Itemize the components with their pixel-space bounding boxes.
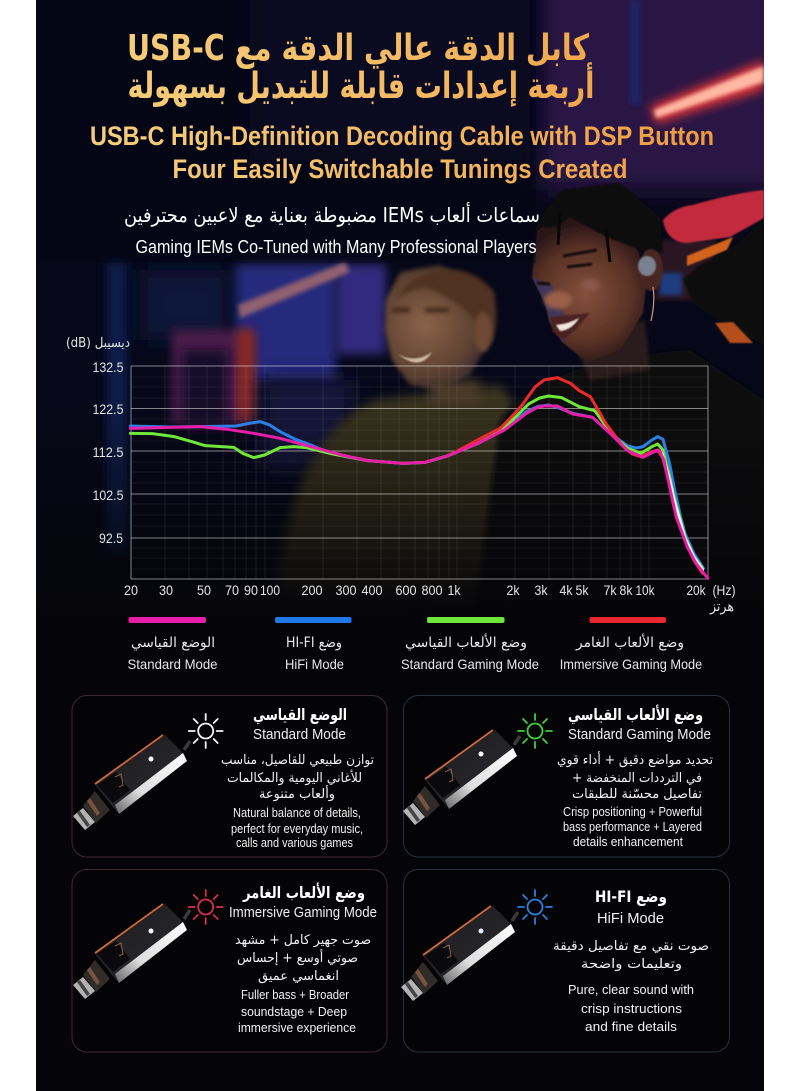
y-axis labels bbox=[92, 359, 124, 546]
card heading: Immersive Gaming Mode bbox=[229, 904, 377, 921]
card heading: Standard Mode bbox=[253, 726, 346, 743]
card description: وتعليمات واضحة bbox=[581, 957, 682, 972]
legend: standard mode: Standard Mode bbox=[128, 656, 218, 672]
x-axis labels: 100 bbox=[260, 582, 280, 598]
card heading bbox=[595, 887, 667, 927]
card heading: الوضع القياسي bbox=[253, 705, 347, 725]
subtitle bbox=[124, 202, 540, 257]
y-axis labels: 122.5 bbox=[92, 401, 124, 417]
icon: blue sun bbox=[518, 890, 552, 924]
card description: صوتي أوسع + إحساس bbox=[237, 949, 358, 966]
legend: standard gaming mode: Standard Gaming Mode bbox=[401, 656, 539, 672]
panel: immersive gaming mode bbox=[72, 870, 387, 1052]
title: Arabic headline: أربعة إعدادات قابلة للتبديل بسهولة bbox=[128, 62, 594, 107]
card heading: وضع الألعاب الغامر bbox=[242, 883, 365, 902]
y-axis unit: ديسيبل (dB) bbox=[66, 336, 130, 351]
card description: انغماسي عميق bbox=[258, 969, 339, 984]
card description: Crisp positioning + Powerful bbox=[563, 804, 702, 819]
device: USB-C decoder, green mode bbox=[403, 730, 520, 825]
legend bbox=[128, 617, 702, 672]
curve: HiFi mode bbox=[130, 405, 703, 568]
curve: white highlight overlap bbox=[662, 454, 703, 570]
x-axis labels: 7k bbox=[604, 582, 617, 598]
legend: immersive gaming mode: وضع الألعاب الغامر bbox=[575, 633, 684, 651]
x-axis labels: 70 bbox=[225, 582, 239, 598]
x-axis labels: 800 bbox=[422, 582, 443, 598]
legend: standard gaming mode bbox=[401, 617, 539, 672]
card description: calls and various games bbox=[236, 835, 353, 850]
legend: immersive gaming mode bbox=[560, 617, 702, 672]
card heading: وضع HI-FI bbox=[595, 887, 667, 906]
card description: للأغاني اليومية والمكالمات bbox=[227, 769, 362, 786]
x-axis labels: 4k bbox=[560, 582, 573, 598]
x-axis labels: 200 bbox=[302, 582, 323, 598]
card description: توازن طبيعي للقاصيل، مناسب bbox=[221, 753, 374, 768]
device: USB-C decoder, white light bbox=[73, 735, 190, 830]
curve: standard mode bbox=[130, 406, 708, 578]
legend: standard mode: الوضع القياسي bbox=[131, 635, 215, 651]
x-axis labels: 10k bbox=[636, 582, 655, 598]
panel: HiFi mode bbox=[401, 870, 730, 1052]
x-axis labels: 2k bbox=[506, 582, 520, 598]
y-axis labels: 92.5 bbox=[99, 530, 123, 546]
card description: تفاصيل محسّنة للطبقات bbox=[572, 787, 702, 802]
x-axis labels: 30 bbox=[159, 582, 173, 598]
card description: bass performance + Layered bbox=[563, 819, 702, 834]
legend: standard gaming mode: وضع الألعاب القياسي bbox=[405, 633, 527, 651]
card description: Natural balance of details, bbox=[233, 805, 361, 820]
icon: white sun bbox=[189, 714, 223, 748]
curve: immersive gaming mode bbox=[447, 378, 703, 573]
chart grid bbox=[131, 366, 708, 579]
card description bbox=[557, 751, 713, 849]
legend: standard mode bbox=[128, 617, 218, 672]
x-axis labels: هرتز bbox=[709, 599, 734, 615]
panel: standard gaming mode bbox=[403, 696, 730, 857]
y-axis labels: 132.5 bbox=[92, 359, 124, 375]
x-axis labels: 400 bbox=[362, 582, 383, 598]
card heading bbox=[229, 883, 377, 921]
card description: crisp instructions bbox=[581, 1001, 683, 1016]
title: Arabic headline: كابل الدقة عالي الدقة مع USB-C bbox=[127, 28, 589, 69]
frequency response chart bbox=[66, 336, 736, 615]
curves bbox=[130, 378, 708, 578]
icon: green sun bbox=[518, 714, 552, 748]
y-axis labels: 112.5 bbox=[92, 444, 124, 460]
card description: and fine details bbox=[585, 1019, 678, 1034]
card description: صوت جهير كامل + مشهد bbox=[235, 933, 371, 948]
legend: HiFi mode: وضع HI-FI bbox=[286, 635, 342, 651]
card heading: Standard Gaming Mode bbox=[568, 726, 711, 743]
device: USB-C decoder, blue mode bbox=[401, 906, 518, 1001]
x-axis labels: 300 bbox=[336, 582, 357, 598]
card description bbox=[235, 933, 371, 1035]
card heading bbox=[253, 705, 347, 743]
card description: Fuller bass + Broader bbox=[241, 987, 350, 1002]
title: Arabic headline bbox=[127, 28, 594, 107]
card description: immersive experience bbox=[238, 1020, 356, 1035]
title: English headline: USB-C High-Definition Decoding Cable with DSP Button bbox=[90, 121, 714, 151]
card heading bbox=[568, 705, 711, 743]
title: English headline bbox=[90, 121, 714, 184]
card heading: وضع الألعاب القياسي bbox=[568, 705, 703, 725]
x-axis labels: 5k bbox=[576, 582, 589, 598]
x-axis labels: 50 bbox=[197, 582, 211, 598]
card description bbox=[221, 753, 374, 850]
title: English headline: Four Easily Switchable Tunings Created bbox=[172, 154, 628, 184]
card description: soundstage + Deep bbox=[241, 1004, 347, 1019]
card description: Pure, clear sound with bbox=[568, 982, 694, 997]
panel: standard mode bbox=[72, 696, 387, 857]
legend: HiFi mode: HiFi Mode bbox=[285, 656, 344, 672]
x-axis labels: 1k bbox=[448, 582, 461, 598]
card description: وألعاب متنوعة bbox=[259, 785, 335, 802]
photo: two gamers in a neon gaming room bbox=[36, 0, 764, 582]
legend: HiFi mode bbox=[275, 617, 352, 672]
curve: standard gaming mode bbox=[130, 396, 703, 568]
x-axis labels: 90 bbox=[244, 582, 258, 598]
card description bbox=[553, 939, 709, 1034]
card description: صوت نقي مع تفاصيل دقيقة bbox=[553, 939, 709, 954]
subtitle: Gaming IEMs Co-Tuned with Many Professional Players bbox=[136, 237, 536, 257]
x-axis labels: (Hz) bbox=[712, 582, 736, 598]
device: USB-C decoder, red mode bbox=[73, 904, 190, 999]
subtitle: سماعات ألعاب IEMs مضبوطة بعناية مع لاعبين محترفين bbox=[124, 202, 540, 227]
card description: perfect for everyday music, bbox=[231, 821, 363, 836]
icon: red sun bbox=[189, 890, 223, 924]
x-axis labels: 3k bbox=[534, 582, 548, 598]
legend: immersive gaming mode: Immersive Gaming Mode bbox=[560, 656, 702, 672]
x-axis labels: 8k bbox=[620, 582, 633, 598]
card heading: HiFi Mode bbox=[597, 910, 664, 927]
card description: في الترددات المنخفضة + bbox=[572, 771, 702, 786]
card description: تحديد مواضع دقيق + أداء قوي bbox=[557, 751, 713, 768]
y-axis labels: 102.5 bbox=[92, 487, 124, 503]
x-axis labels: 20 bbox=[124, 582, 138, 598]
x-axis labels: 600 bbox=[396, 582, 417, 598]
x-axis labels bbox=[124, 582, 736, 615]
x-axis labels: 20k bbox=[686, 582, 706, 598]
card description: details enhancement bbox=[573, 834, 683, 849]
